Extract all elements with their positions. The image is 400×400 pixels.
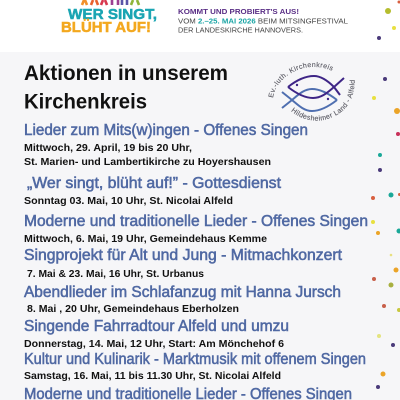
event: Fahrradtour <box>24 318 289 350</box>
event: Singprojekt: Singprojekt für Alt und Jung - Mitmachkonzert <box>24 247 343 264</box>
logo wordmark <box>61 7 157 36</box>
event: Lieder zum Mits(w)ingen: Mittwoch, 29. April, 19 bis 20 Uhr, <box>24 142 192 154</box>
festival tagline: DER LANDESKIRCHE HANNOVERS. <box>178 26 303 34</box>
event: Singprojekt: 7. Mai & 23. Mai, 16 Uhr, St. Urbanus <box>27 268 204 280</box>
event: Gottesdienst: „Wer singt, blüht auf!” - Gottesdienst <box>27 175 282 192</box>
event: Gottesdienst: Sonntag 03. Mai, 10 Uhr, St. Nicolai Alfeld <box>24 195 233 207</box>
event: Lieder zum Mits(w)ingen: St. Marien- und Lambertikirche zu Hoyershausen <box>24 156 271 168</box>
icon: rainbow figures <box>82 0 139 5</box>
confetti dots <box>371 0 400 389</box>
event: Fahrradtour: Singende Fahrradtour Alfeld und umzu <box>24 318 289 335</box>
festival tagline <box>178 7 348 34</box>
event: Lieder zum Mits(w)ingen: Lieder zum Mits(w)ingen - Offenes Singen <box>24 122 308 139</box>
heading <box>24 62 228 114</box>
event: Moderne und traditionelle Lieder, Kemme <box>24 213 368 245</box>
event: Gottesdienst <box>24 175 282 207</box>
logo wordmark: BLÜHT AUF! <box>61 19 151 36</box>
heading: Kirchenkreis <box>24 90 147 114</box>
event: Fahrradtour: Donnerstag, 14. Mai, 12 Uhr, Start: Am Mönchehof 6 <box>24 338 284 350</box>
event: Kultur und Kulinarik <box>24 351 366 382</box>
event: Kultur und Kulinarik: Samstag, 16. Mai, 11 bis 11.30 Uhr, St. Nicolai Alfeld <box>24 370 281 382</box>
event: Singprojekt <box>24 247 343 280</box>
festival logo <box>61 0 157 36</box>
icon: church district seal with two fish: Ev.-luth. Kirchenkreis <box>268 62 333 98</box>
event: Kultur und Kulinarik: Kultur und Kulinarik - Marktmusik mit offenem Singen <box>24 351 366 368</box>
event: Moderne und traditionelle Lieder, Kemme: Moderne und traditionelle Lieder - Offenes Singen <box>24 213 368 230</box>
festival tagline: VOM 2.–25. MAI 2026 BEIM MITSINGFESTIVAL <box>178 16 348 26</box>
heading: Aktionen in unserem <box>24 62 228 85</box>
logo wordmark: WER SINGT, <box>68 7 157 23</box>
event: Abendlieder: Abendlieder im Schlafanzug mit Hanna Jursch <box>24 284 341 301</box>
event: Abendlieder <box>24 284 341 315</box>
icon: church district seal with two fish <box>268 62 355 121</box>
festival tagline: KOMMT UND PROBIERT'S AUS! <box>178 7 299 16</box>
icon: church district seal with two fish: Hildesheimer Land - Alfeld <box>291 80 355 121</box>
event: Abendlieder: 8. Mai , 20 Uhr, Gemeindehaus Eberholzen <box>27 303 239 315</box>
event: Moderne und traditionelle Lieder, Kemme: Mittwoch, 6. Mai, 19 Uhr, Gemeindehaus Kemme <box>24 233 267 245</box>
event: Lieder zum Mits(w)ingen <box>24 122 308 168</box>
